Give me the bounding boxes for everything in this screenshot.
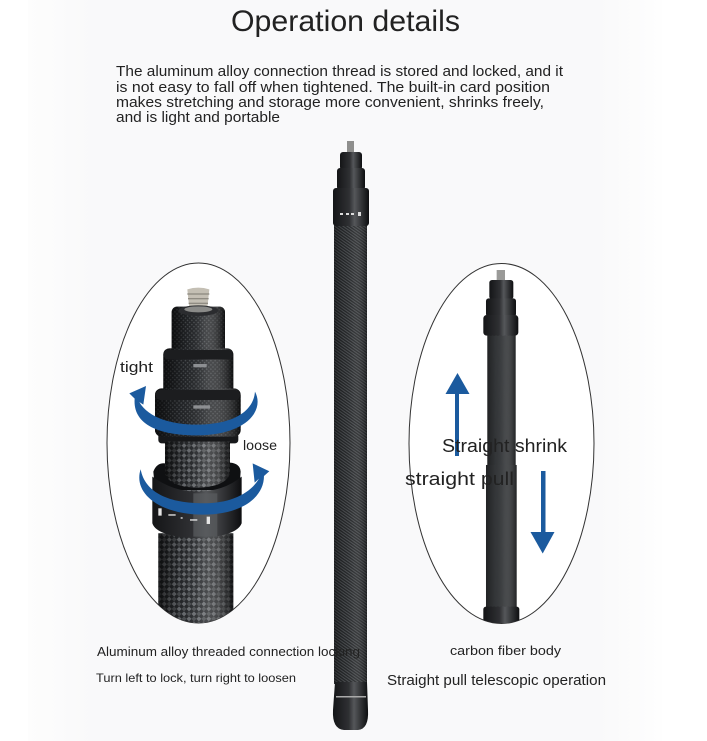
arrow: up — [446, 373, 470, 456]
label: straight pull: straight pull — [405, 468, 514, 489]
pole close-up — [152, 288, 242, 627]
arrow: tighten rotation — [129, 386, 258, 435]
arrow: down — [530, 471, 554, 554]
caption: aluminum alloy: Aluminum alloy threaded connection locking — [97, 644, 360, 659]
panel: left detail ellipse — [107, 263, 290, 627]
caption: telescopic operation: Straight pull telescopic operation — [387, 673, 606, 689]
description text: and is light and portable — [116, 110, 280, 126]
label: Straight shrink: Straight shrink — [442, 435, 568, 456]
infographic canvas — [96, 10, 606, 730]
pole retracted view — [483, 270, 519, 623]
description text — [116, 64, 563, 126]
description text: The aluminum alloy connection thread is stored and locked, and it — [116, 64, 563, 80]
caption: turn direction: Turn left to lock, turn right to loosen — [96, 671, 296, 685]
arrow: loosen rotation — [139, 463, 269, 515]
description text: makes stretching and storage more convenient, shrinks freely, — [116, 95, 544, 111]
label: loose: loose — [243, 438, 277, 453]
central telescopic pole — [333, 141, 369, 730]
caption: carbon fiber body: carbon fiber body — [450, 643, 562, 658]
panel: right detail ellipse — [405, 264, 594, 624]
label: tight: tight — [120, 359, 154, 376]
title: Operation details — [231, 5, 460, 38]
description text: is not easy to fall off when tightened. The built-in card position — [116, 80, 550, 96]
